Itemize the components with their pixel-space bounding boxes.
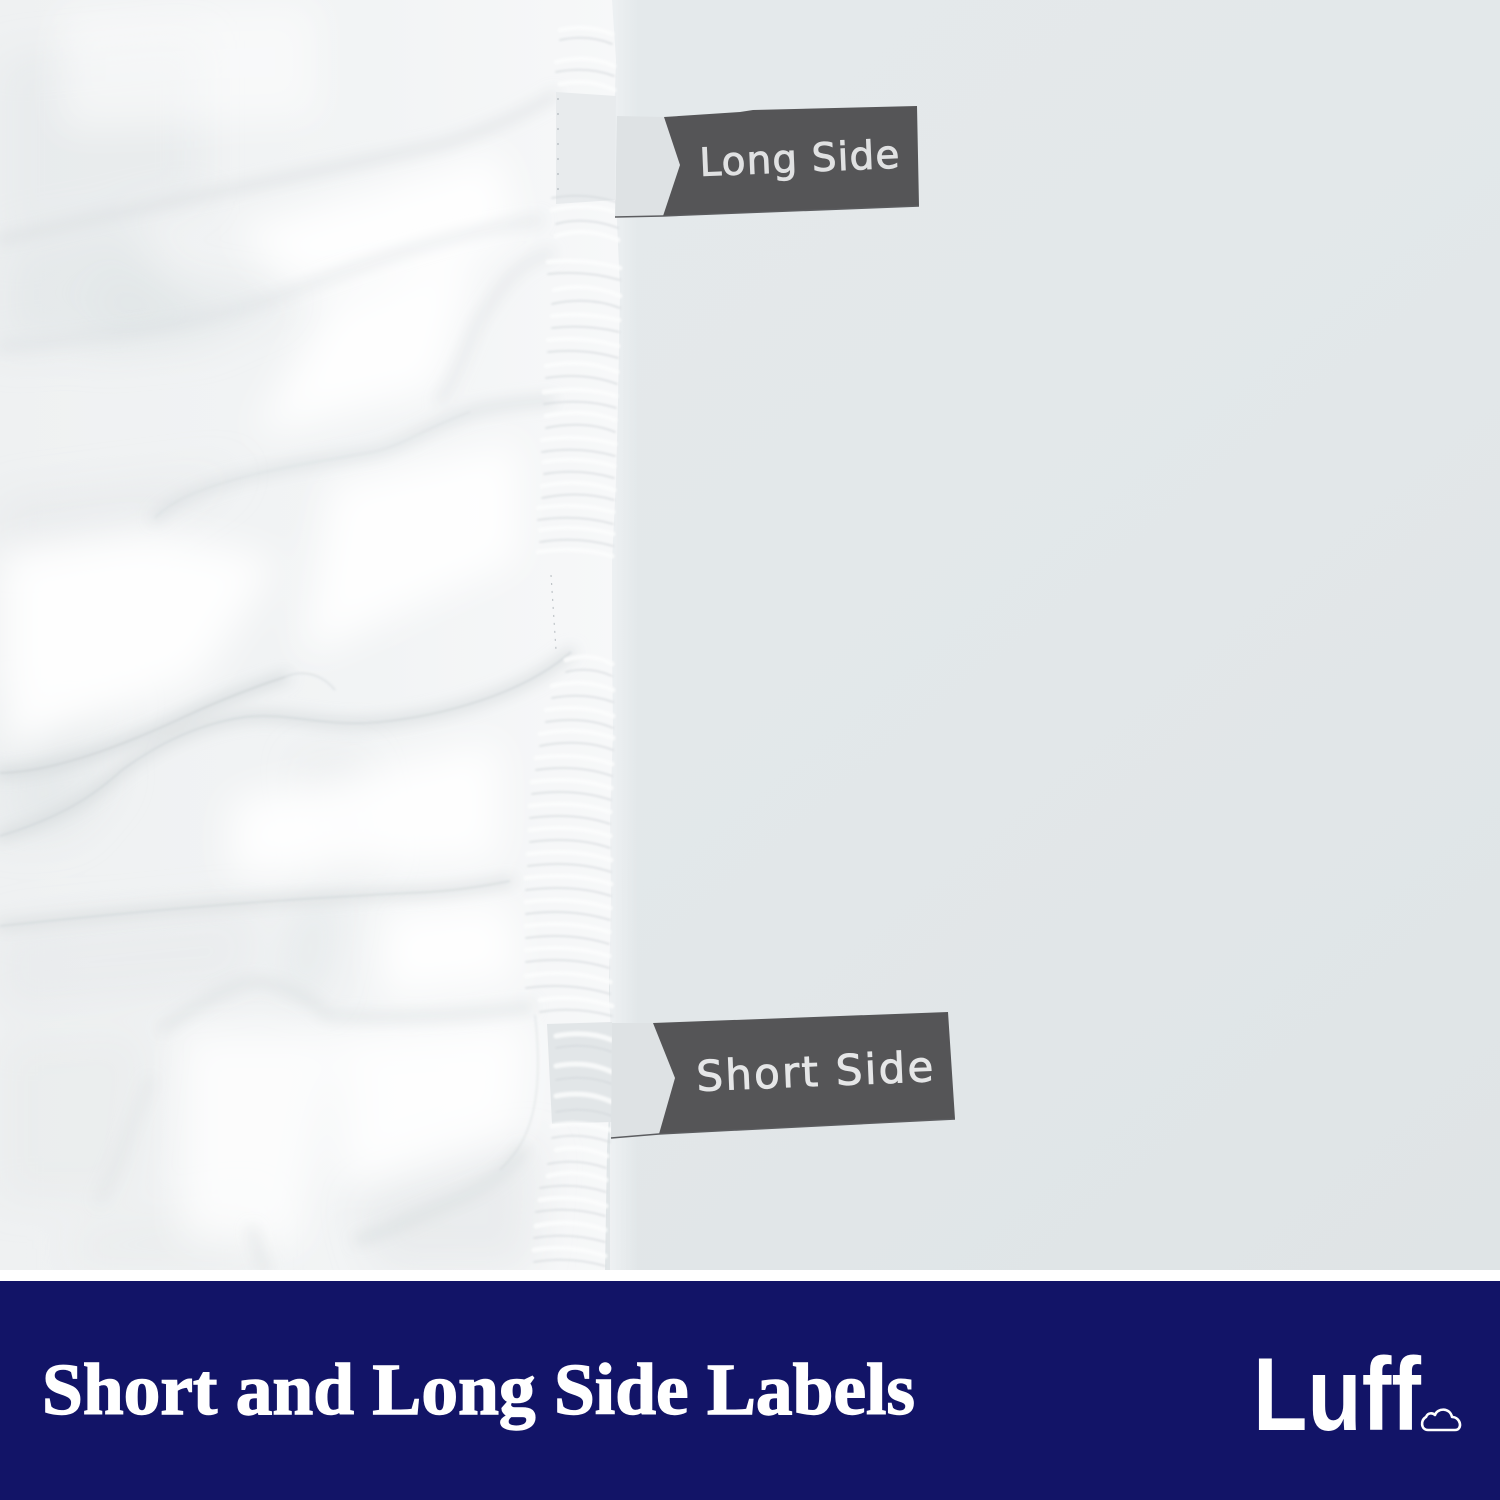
fold creases [0,412,571,1170]
label: Long Side [615,106,919,217]
photo: gathered white fitted sheet [0,0,620,1270]
logo: Luff: Luff [1253,1337,1421,1453]
fabric shading [0,0,571,1270]
fold shadows [0,95,571,1270]
label text: Short Side: Short Side [695,1042,934,1101]
elastic gathers [526,28,620,1266]
label: Short Side [611,1012,955,1138]
title: Short and Long Side Labels [42,1349,915,1430]
footer banner [0,1281,1500,1500]
label pocket: Short Side [547,1022,612,1124]
label text: Long Side: Long Side [699,133,900,186]
icon: cloud [1422,1410,1460,1430]
white divider [0,1270,1500,1281]
label pocket: Long Side [556,92,616,204]
